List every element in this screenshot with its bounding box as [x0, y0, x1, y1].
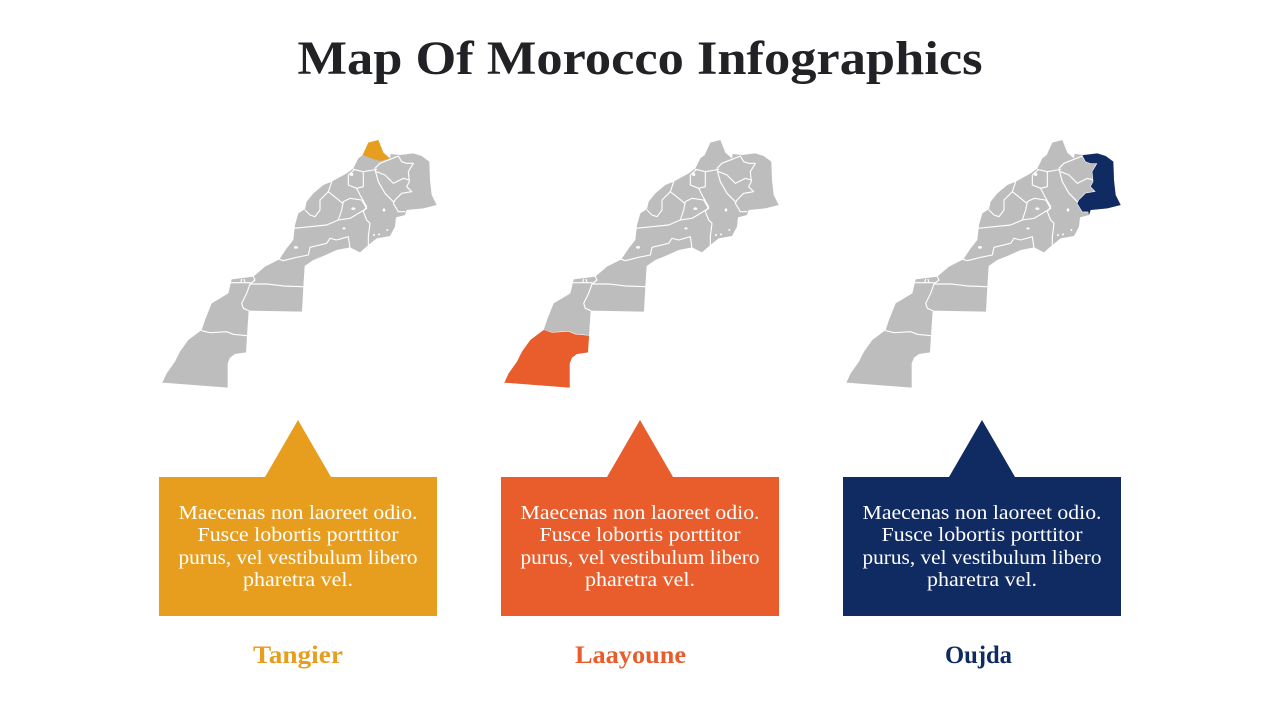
map: Tangier highlighted [161, 140, 437, 388]
callout: Laayoune: pharetra vel. [585, 569, 695, 591]
callout: Oujda [843, 420, 1121, 616]
callout: Tangier: Maecenas non laoreet odio. [178, 502, 418, 524]
label: Oujda: Oujda [945, 642, 1012, 669]
title: Map Of Morocco Infographics [298, 32, 983, 85]
label: Laayoune: Laayoune [575, 642, 686, 669]
panel: Oujda [843, 140, 1121, 669]
callout: Laayoune: Fusce lobortis porttitor [540, 524, 741, 546]
callout: Oujda: purus, vel vestibulum libero [862, 547, 1102, 569]
callout: Laayoune: purus, vel vestibulum libero [520, 547, 760, 569]
map: Laayoune highlighted [503, 140, 779, 388]
callout: Tangier [159, 420, 437, 616]
map: Oujda highlighted [845, 140, 1121, 388]
callout: Tangier: Fusce lobortis porttitor [198, 524, 399, 546]
callout: Oujda: Maecenas non laoreet odio. [862, 502, 1102, 524]
callout: Oujda: pharetra vel. [927, 569, 1037, 591]
panel: Tangier [159, 140, 437, 669]
callout: Oujda: Fusce lobortis porttitor [882, 524, 1083, 546]
callout: Laayoune: Maecenas non laoreet odio. [520, 502, 760, 524]
panel: Laayoune [501, 140, 779, 669]
callout: Tangier: pharetra vel. [243, 569, 353, 591]
callout: Tangier: purus, vel vestibulum libero [178, 547, 418, 569]
callout: Laayoune [501, 420, 779, 616]
label: Tangier: Tangier [253, 642, 343, 669]
